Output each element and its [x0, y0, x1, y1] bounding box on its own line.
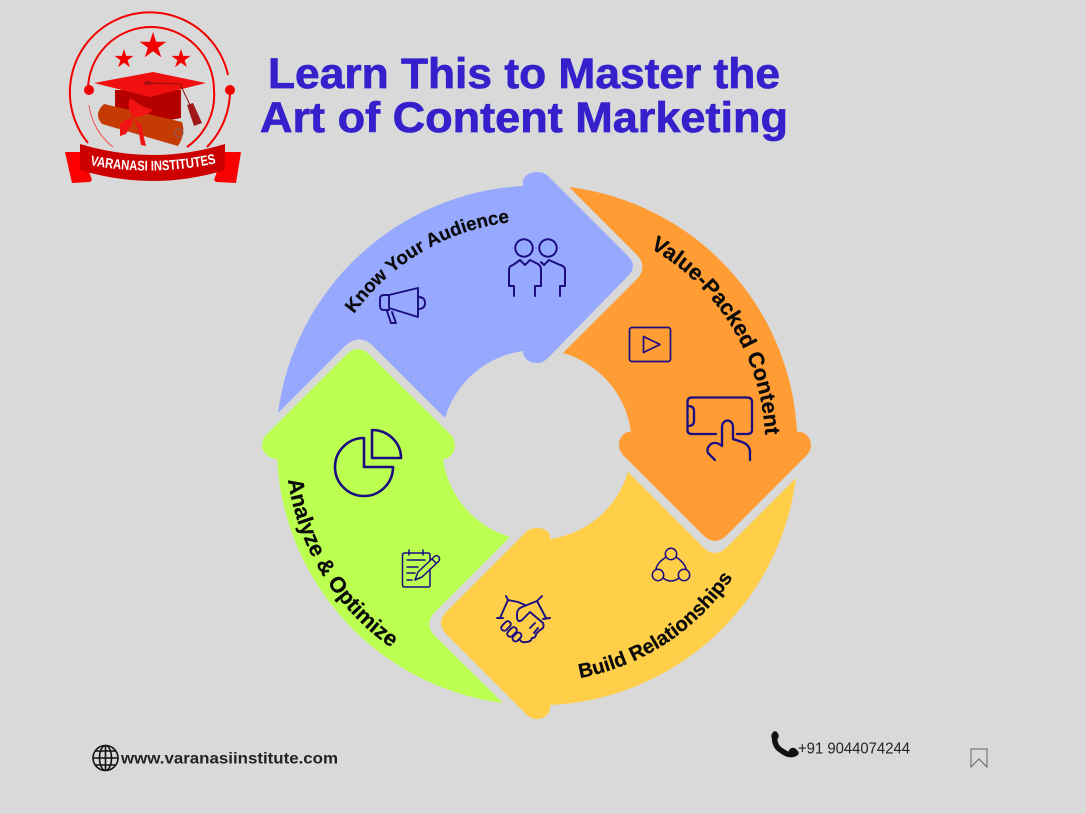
logo text: VARANASI INSTITUTES — [92, 154, 216, 171]
label: Value-Packed Content: Value-Packed Content — [654, 234, 780, 435]
icon: globe — [93, 746, 118, 770]
icon: telephone — [775, 734, 796, 755]
icon: connected circles — [652, 548, 690, 581]
label: Know Your Audience: Know Your Audience — [344, 212, 509, 314]
green arrow segment — [262, 349, 510, 703]
label: Analyze & Optimize: Analyze & Optimize — [288, 480, 396, 646]
footer: phone — [771, 732, 910, 758]
logo: Varanasi Institutes — [65, 11, 241, 183]
title: Learn This to Master the — [268, 50, 780, 98]
panel: Build Relationships — [441, 472, 796, 719]
icon: play button — [630, 328, 670, 362]
panel: Value-Packed Content — [563, 187, 811, 541]
yellow arrow segment — [441, 472, 796, 719]
title: Art of Content Marketing — [260, 94, 788, 142]
icon: two people — [509, 239, 565, 296]
label: Build Relationships: Build Relationships — [578, 573, 732, 678]
title — [260, 50, 788, 142]
footer: phone: +91 9044074244 — [798, 740, 910, 758]
icon: handshake — [497, 596, 550, 643]
icon: pie chart — [335, 430, 401, 496]
icon: bookmark — [971, 749, 987, 767]
icon: notepad and pencil — [402, 550, 440, 587]
blue arrow segment — [278, 172, 633, 418]
icon: megaphone — [380, 288, 425, 323]
icon: touch tablet — [688, 398, 752, 460]
footer: website — [93, 746, 338, 770]
panel: Know Your Audience — [278, 172, 633, 418]
orange arrow segment — [563, 187, 811, 541]
panel: Analyze & Optimize — [262, 349, 510, 703]
footer: website: www.varanasiinstitute.com — [120, 750, 338, 768]
